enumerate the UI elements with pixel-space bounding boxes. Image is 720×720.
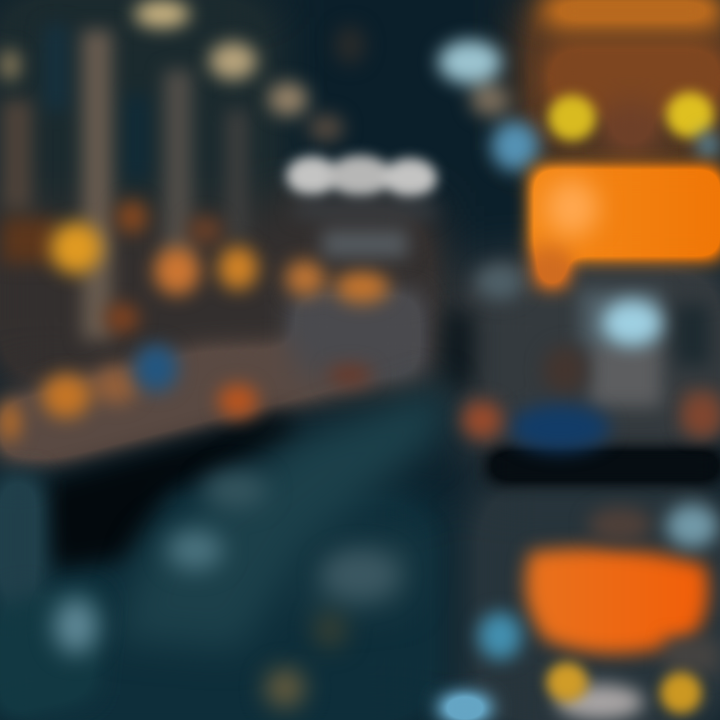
street band on the left: [0, 295, 420, 458]
pale blue lights top centre: [438, 40, 718, 300]
pale blue light at the bottom edge: [439, 696, 491, 720]
grey block below the sign: [295, 203, 435, 258]
orange lights on the left: [0, 200, 389, 442]
pale blue window right: [602, 300, 662, 346]
blue figure on the left: [134, 344, 178, 392]
teal wall at the left edge: [0, 480, 100, 715]
red lights right: [462, 396, 720, 439]
vertical columns: [2, 25, 248, 340]
lights lower left: [54, 472, 398, 708]
large orange sign upper right: [534, 170, 720, 285]
black shadow band on the right: [490, 452, 720, 480]
large orange sign lower right: [525, 548, 708, 654]
pale sign in the centre: [286, 155, 437, 198]
orange sign highlight: [546, 180, 598, 236]
top right awning: [545, 0, 720, 145]
yellow lamps bottom right: [546, 662, 702, 714]
diagonal road: [115, 385, 445, 650]
yellow lamps top right: [548, 92, 714, 141]
lower right details: [478, 504, 720, 720]
black shadow band on the left: [42, 310, 473, 570]
street lights top left: [0, 0, 366, 142]
blue figure on the right: [510, 346, 610, 452]
right storefront: [580, 290, 720, 432]
